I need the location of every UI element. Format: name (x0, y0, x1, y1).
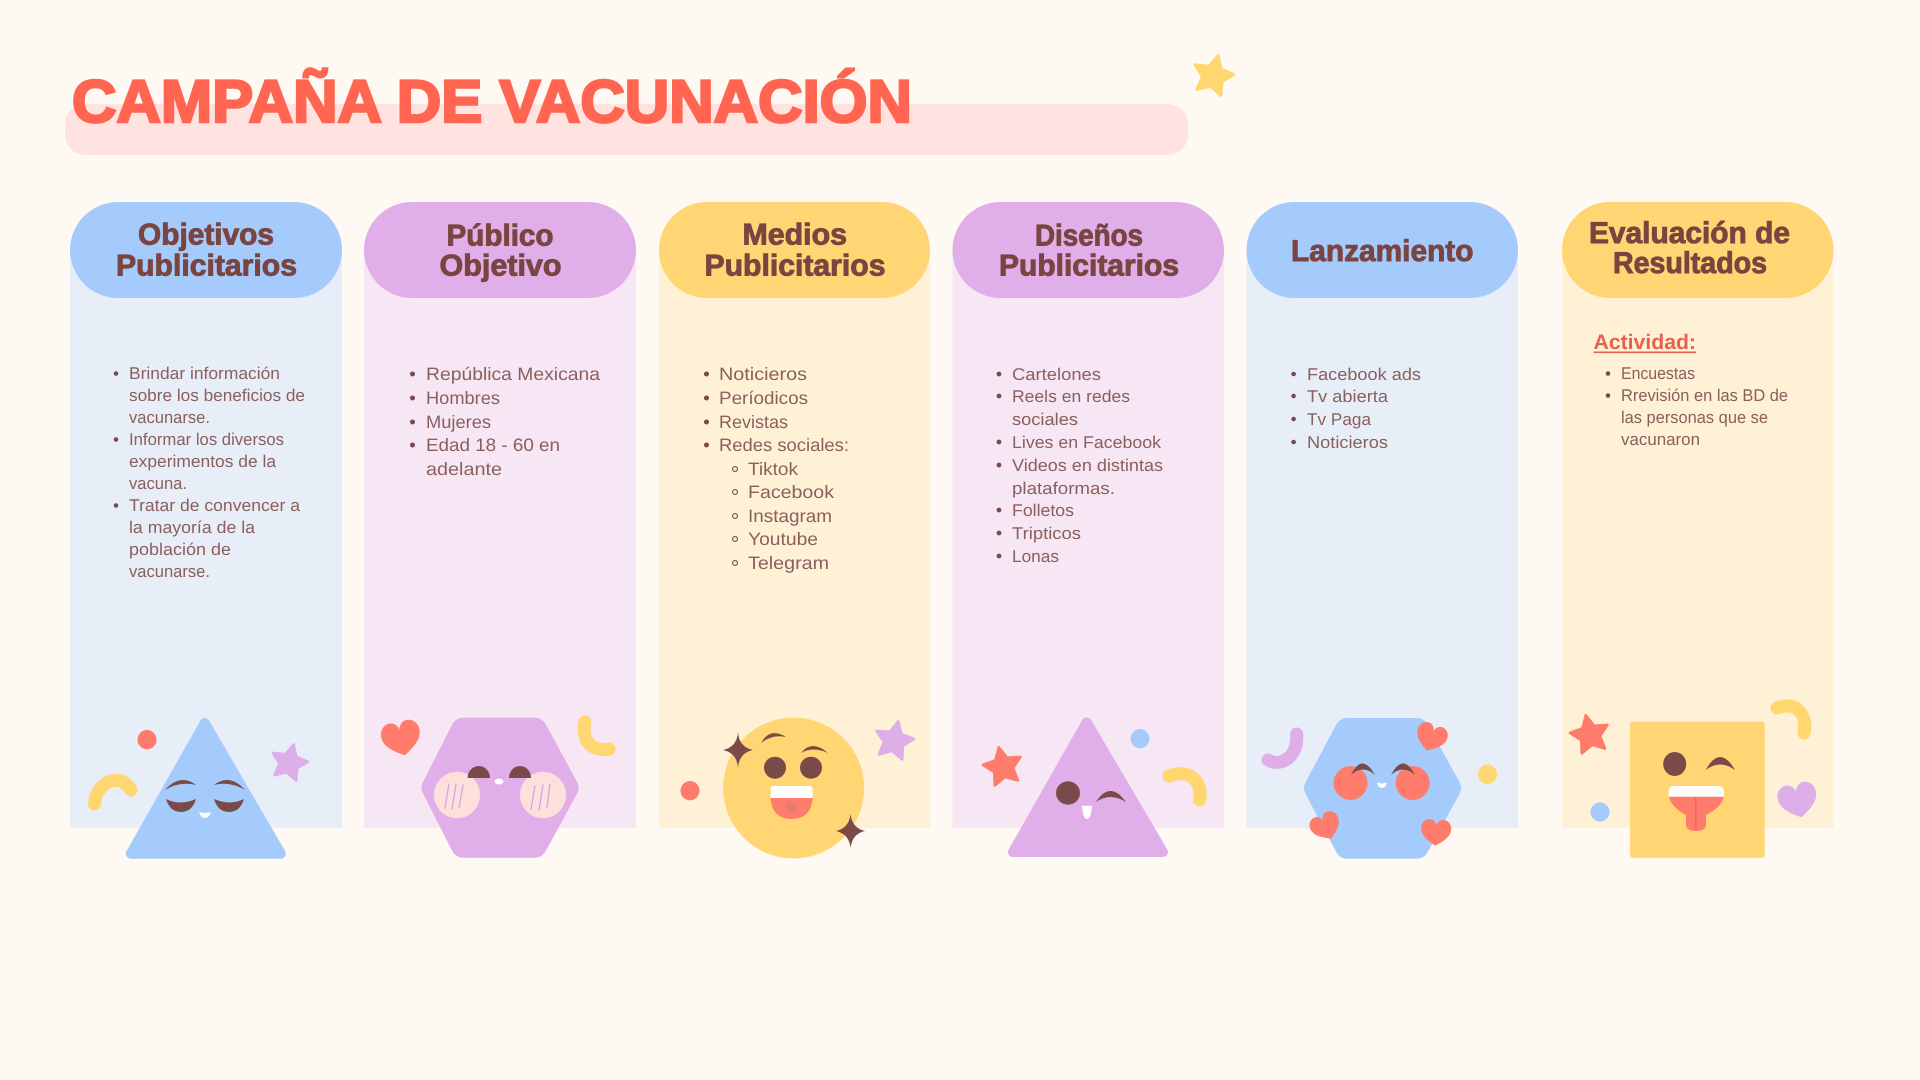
bullet list: diseños (997, 365, 1163, 566)
panel: objetivos publicitarios (70, 202, 342, 854)
heading: objetivos publicitarios: Objetivos (138, 218, 274, 252)
panel: medios publicitarios (659, 202, 930, 858)
icon: winking purple triangle character (980, 722, 1200, 852)
bullet list: público: Hombres (426, 388, 500, 408)
bullet list: actividad: Rrevisión en las BD de (1621, 386, 1788, 405)
icon: happy yellow circle character (680, 717, 917, 858)
heading: lanzamiento: Lanzamiento (1291, 235, 1474, 268)
heading: evaluación de resultados (1589, 217, 1790, 280)
panel: diseños publicitarios (952, 202, 1224, 852)
bullet list: objetivos: vacuna. (129, 474, 187, 493)
bullet list: lanzamiento: Tv Paga (1307, 410, 1372, 429)
bullet list: público (410, 364, 601, 479)
bullet list: objetivos: población de (129, 540, 231, 559)
heading: público objetivo: Objetivo (440, 250, 562, 282)
heading: medios publicitarios (704, 218, 886, 282)
bullet list: objetivos: experimentos de la (129, 452, 277, 471)
panel: público objetivo (364, 202, 636, 846)
bullet list: diseños: Lonas (1012, 547, 1059, 566)
bullet list: objetivos: Informar los diversos (129, 430, 284, 449)
header pill: público (364, 202, 636, 298)
header pill: evaluación (1562, 202, 1834, 298)
bullet list: diseños: plataformas. (1012, 479, 1115, 498)
bullet list: medios: Tiktok (748, 459, 799, 479)
bullet list: objetivos: Tratar de convencer a (129, 496, 301, 515)
bullet list: medios: Telegram (748, 553, 829, 573)
bullet list: diseños: Folletos (1012, 501, 1074, 520)
bullet list: objetivos: vacunarse. (129, 562, 210, 581)
bullet list: lanzamiento: Noticieros (1307, 433, 1388, 452)
bullet list: objetivos: la mayoría de la (129, 518, 256, 537)
bullet list: medios: Revistas (719, 412, 788, 432)
bullet list: lanzamiento (1291, 365, 1421, 452)
heading: objetivos publicitarios (116, 218, 297, 282)
header pill: objetivos (70, 202, 342, 298)
panel: evaluación de resultados (1562, 202, 1834, 858)
heading: público objetivo (440, 220, 562, 282)
bullet list: diseños: Videos en distintas (1012, 456, 1163, 475)
bullet list: diseños: Cartelones (1012, 365, 1101, 384)
header pill: lanzamiento (1246, 202, 1518, 298)
header pill: diseños (952, 202, 1224, 298)
bullet list: medios: Youtube (748, 529, 818, 549)
heading: diseños publicitarios: Publicitarios (999, 250, 1179, 282)
header pill: medios (659, 202, 930, 298)
bullet list: lanzamiento: Facebook ads (1307, 365, 1421, 384)
bullet list: diseños: sociales (1012, 410, 1078, 429)
bullet list: público: Edad 18 - 60 en (426, 435, 560, 455)
heading: medios publicitarios: Medios (742, 218, 847, 252)
heading: objetivos publicitarios: Publicitarios (116, 250, 297, 282)
bullet list: diseños: Reels en redes (1012, 387, 1130, 406)
bullet list: actividad (1606, 364, 1788, 449)
title: CAMPAÑA DE VACUNACIÓN (72, 68, 912, 135)
bullet list: objetivos: vacunarse. (129, 408, 210, 427)
panel: lanzamiento (1246, 202, 1518, 847)
icon: title star (1190, 51, 1237, 97)
bullet list: objetivos: Brindar información (129, 364, 280, 383)
bullet list: medios: Instagram (748, 506, 832, 526)
icon: tongue-out yellow square character (1567, 706, 1821, 858)
bullet list: medios: Períodicos (719, 388, 808, 408)
icon: sleepy blue triangle character (94, 723, 311, 854)
heading: evaluación de resultados: Evaluación de (1589, 217, 1790, 250)
bullet list: público: Mujeres (426, 412, 491, 432)
bullet list: público: adelante (426, 459, 502, 479)
bullet list: público: República Mexicana (426, 364, 601, 384)
bullet list: lanzamiento: Tv abierta (1307, 387, 1389, 406)
bullet list: medios: Facebook (748, 482, 835, 502)
subheading: actividad: Actividad: (1594, 331, 1696, 354)
bullet list: objetivos: sobre los beneficios de (129, 386, 305, 405)
bullet list: medios (704, 364, 849, 573)
heading: diseños publicitarios (999, 220, 1179, 282)
bullet list: medios: Noticieros (719, 364, 807, 384)
bullet list: medios: Redes sociales: (719, 435, 849, 455)
icon: loving blue hexagon character (1268, 720, 1497, 847)
bullet list: actividad: vacunaron (1621, 430, 1700, 449)
heading: evaluación de resultados: Resultados (1613, 247, 1767, 280)
bullet list: objetivos (114, 364, 305, 581)
bullet list: actividad: las personas que se (1621, 408, 1768, 427)
heading: diseños publicitarios: Diseños (1035, 220, 1143, 252)
heading: público objetivo: Público (446, 220, 554, 252)
bullet list: diseños: Lives en Facebook (1012, 433, 1162, 452)
icon: shy purple hexagon character (379, 718, 609, 846)
bullet list: actividad: Encuestas (1621, 364, 1695, 383)
heading: medios publicitarios: Publicitarios (704, 250, 886, 282)
bullet list: diseños: Tripticos (1012, 524, 1081, 543)
title band (65, 104, 1188, 155)
